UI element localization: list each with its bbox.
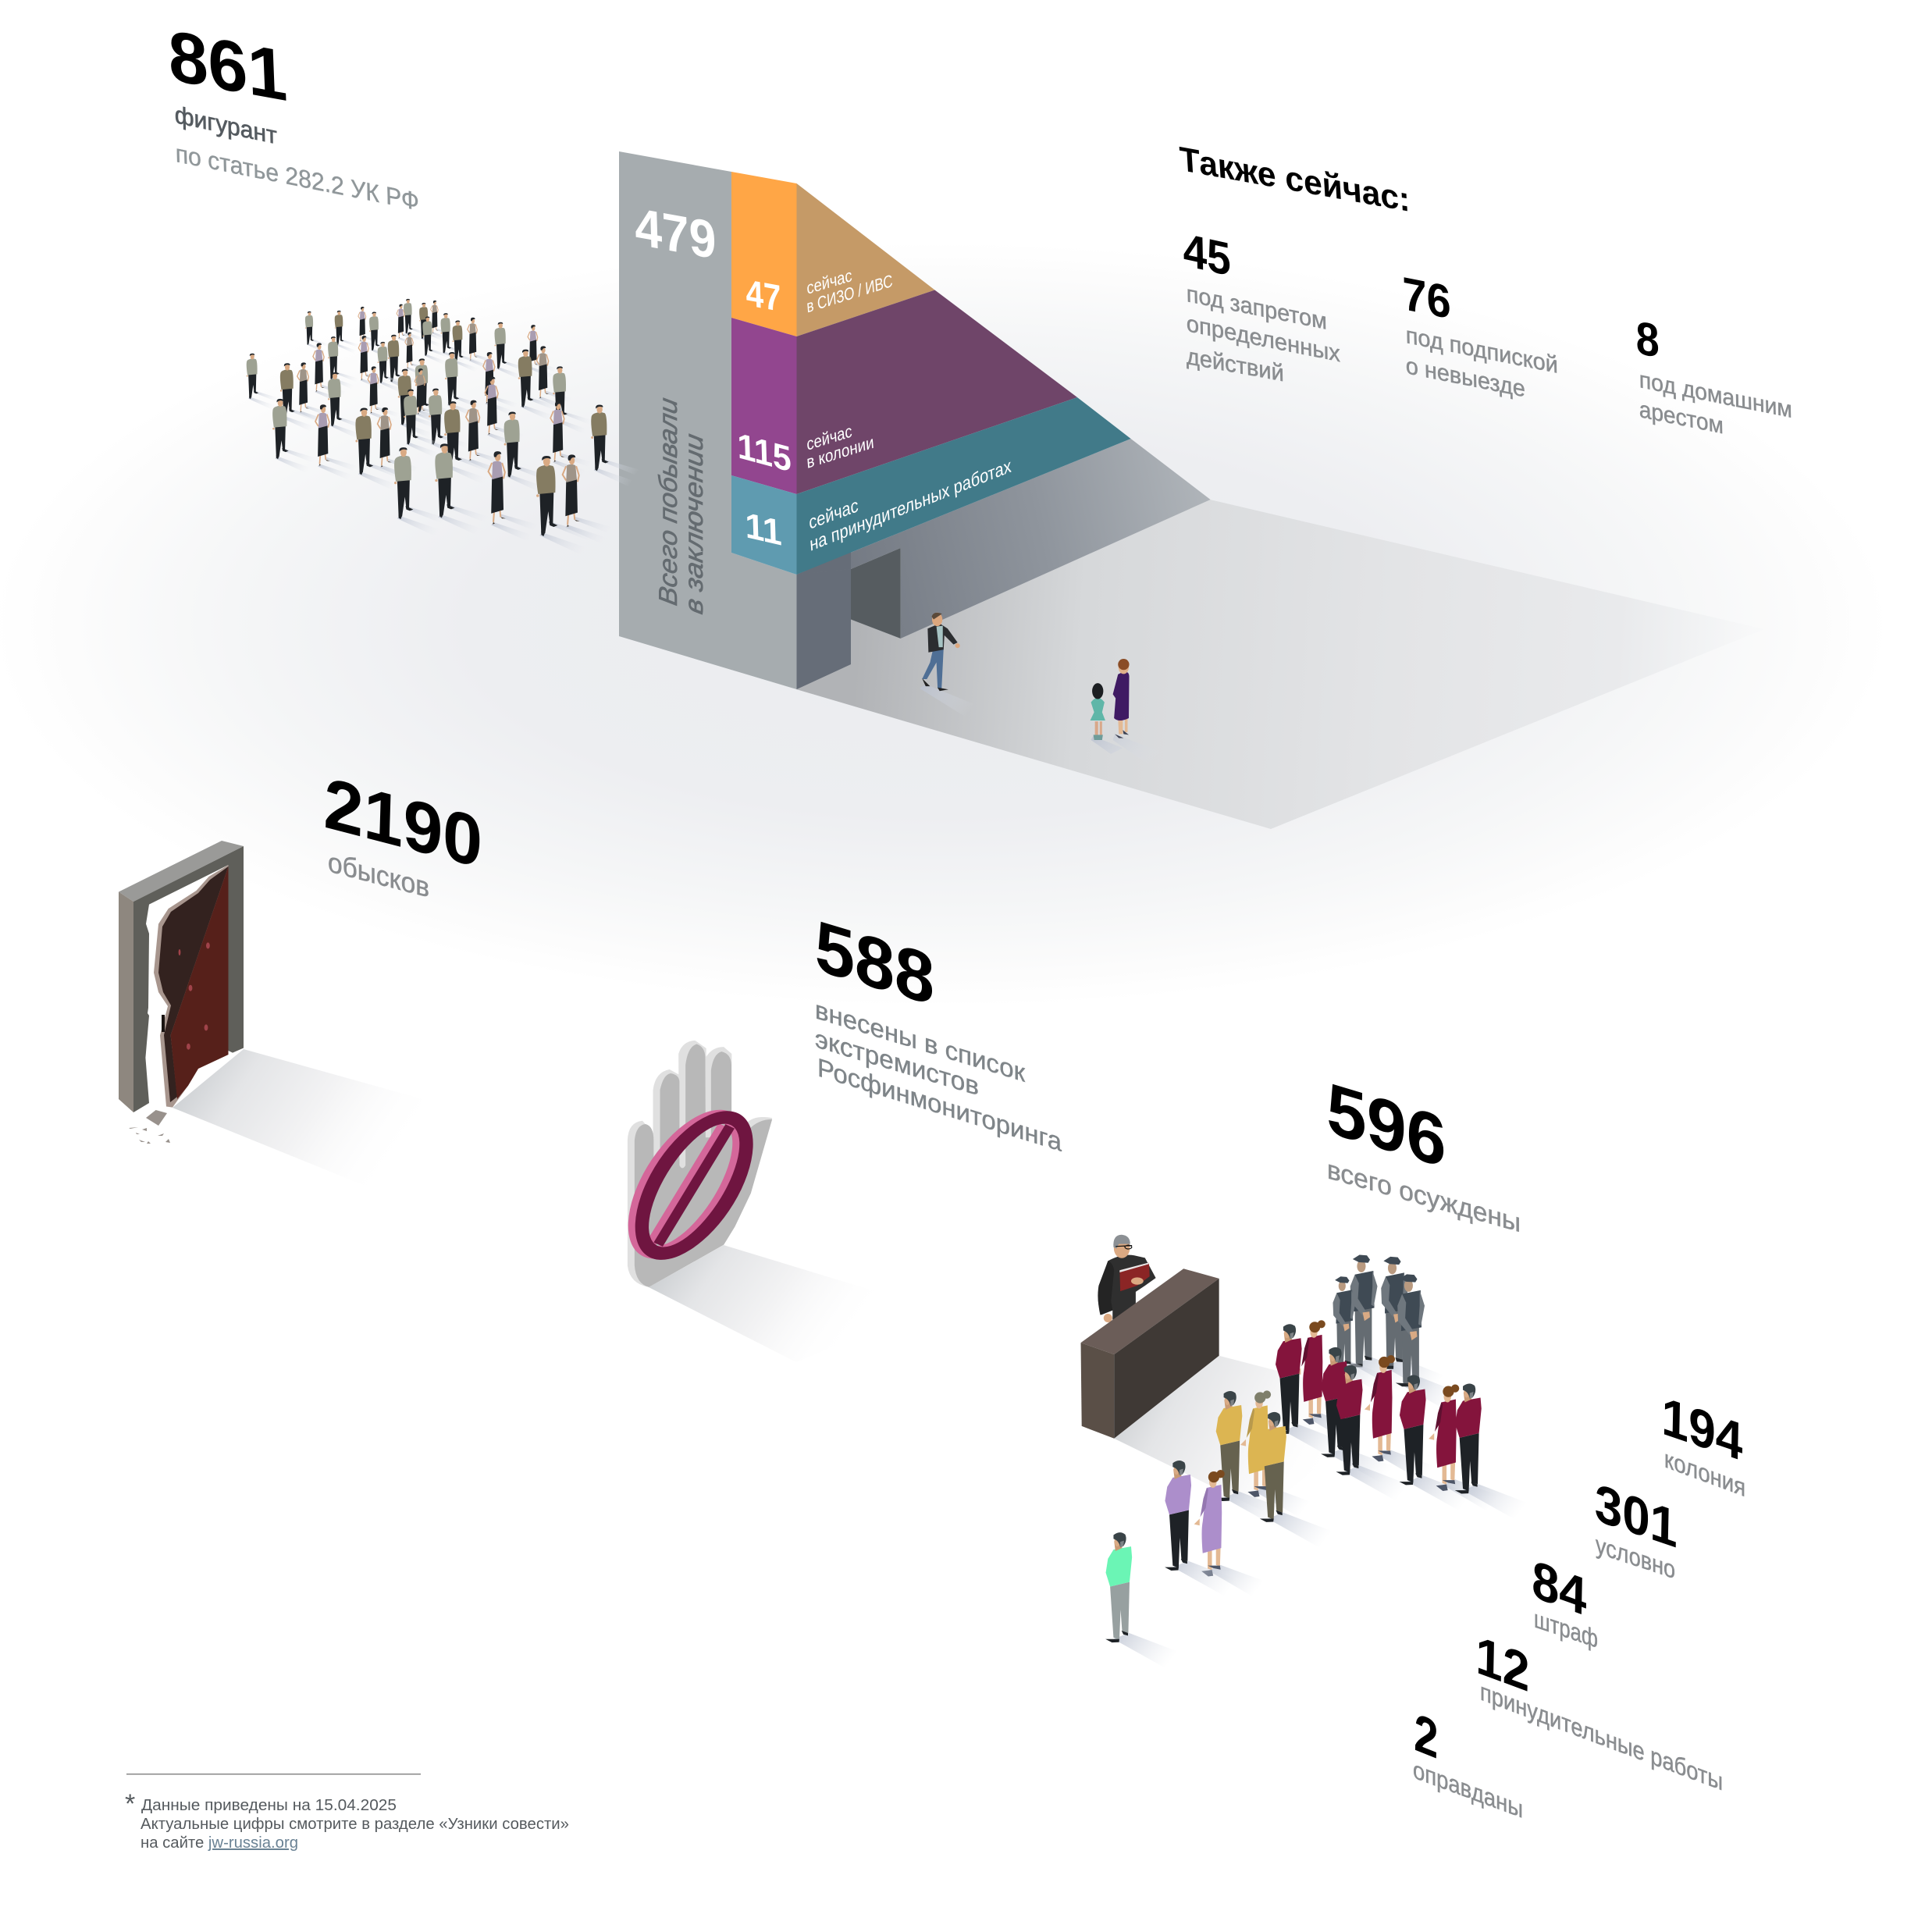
label: extremist list	[815, 995, 1062, 1158]
orange block	[731, 172, 796, 336]
label 45	[1186, 281, 1340, 386]
panel: imprisonment wall	[619, 151, 1211, 689]
label: SIZO: сейчас	[806, 265, 852, 298]
panel: also now	[1179, 140, 1792, 439]
icon: broken door	[119, 841, 244, 1144]
panel: extremist list	[604, 905, 1062, 1362]
panel: convicted	[1081, 1067, 1745, 1824]
label: total imprisoned	[654, 396, 709, 616]
label 76: под подпиской	[1405, 322, 1558, 379]
wall side in gradient	[796, 439, 1211, 689]
crowd of defendants	[247, 299, 639, 557]
stat 194: колония	[1664, 1445, 1745, 1503]
desk	[1081, 1268, 1219, 1439]
gray total block	[619, 151, 796, 689]
woman with child	[1091, 659, 1166, 766]
hand shadow	[649, 1245, 929, 1362]
panel: searches	[119, 761, 484, 1187]
label: extremist list: экстремистов	[815, 1024, 979, 1101]
number 2190: 2190	[322, 761, 484, 883]
number 588: 588	[814, 905, 935, 1020]
number 11: 11	[745, 505, 782, 553]
label 45: определенных	[1186, 311, 1340, 367]
label 45: действий	[1186, 343, 1284, 386]
stat 84: штраф	[1534, 1604, 1598, 1653]
number 479: 479	[634, 197, 717, 271]
judge	[1098, 1235, 1156, 1322]
stat 2: оправданы	[1413, 1756, 1523, 1824]
label: extremist list: Росфинмониторинга	[817, 1053, 1062, 1158]
stat 12	[1475, 1624, 1723, 1797]
blue block	[731, 475, 796, 575]
stat 8: 8	[1635, 311, 1660, 367]
label: total imprisoned: в заключении	[680, 432, 709, 616]
label: colony: сейчас	[806, 422, 852, 454]
number 596: 596	[1326, 1067, 1447, 1183]
label 45: под запретом	[1186, 281, 1327, 335]
label 76: о невыезде	[1405, 353, 1525, 403]
label: article: по статье 282.2 УК РФ	[175, 139, 419, 215]
walking man	[920, 613, 980, 718]
stat 12: принудительные работы	[1480, 1678, 1723, 1797]
footnote text: на сайте jw-russia.org	[141, 1834, 298, 1852]
desk shadow	[1114, 1356, 1401, 1511]
label: colony: в колонии	[806, 432, 874, 472]
purple block	[731, 318, 796, 494]
stat 12: 12	[1475, 1624, 1530, 1703]
label: convicted: всего осуждены	[1327, 1155, 1521, 1238]
background glow	[0, 242, 1889, 1007]
stat 194: 194	[1661, 1386, 1743, 1472]
stat 301: 301	[1594, 1472, 1678, 1560]
stat 76: 76	[1402, 267, 1451, 329]
pillar side	[796, 569, 851, 689]
label: SIZO: в СИЗО / ИВС	[806, 271, 893, 316]
label: forced labor: на принудительных работах	[809, 455, 1012, 556]
tan wedge	[796, 183, 935, 336]
colony group	[1276, 1320, 1531, 1520]
number 47: 47	[745, 272, 781, 320]
label 76	[1405, 322, 1558, 403]
label 8: арестом	[1639, 397, 1724, 439]
floor shadow	[796, 500, 1764, 829]
number 861: 861	[167, 15, 289, 116]
fine group	[1165, 1461, 1267, 1596]
label: forced labor: сейчас	[808, 495, 859, 534]
icon: hand with prohibition sign	[604, 1041, 777, 1287]
dark purple wedge	[796, 290, 1077, 494]
footnote	[125, 1774, 569, 1852]
footnote text	[141, 1797, 569, 1852]
label: searches: обысков	[328, 846, 429, 904]
asterisk: *	[125, 1789, 135, 1819]
stat 2: 2	[1414, 1701, 1439, 1770]
guards	[1332, 1254, 1462, 1411]
stat 84: 84	[1532, 1548, 1587, 1628]
number 115: 115	[737, 425, 792, 479]
footnote text: Актуальные цифры смотрите в разделе «Узники совести»	[141, 1816, 569, 1833]
label: extremist list: внесены в список	[815, 995, 1025, 1088]
heading: Также сейчас:	[1179, 140, 1411, 219]
label 8: под домашним	[1639, 367, 1792, 423]
stat 84	[1532, 1548, 1598, 1653]
stat 2	[1413, 1701, 1523, 1824]
court scene	[1081, 1235, 1531, 1668]
wall doorway	[851, 548, 901, 639]
probation group	[1215, 1390, 1336, 1548]
stat 301: условно	[1596, 1530, 1675, 1584]
label: total imprisoned: Всего побывали	[654, 396, 683, 607]
stat: 861	[167, 15, 419, 215]
acquitted figure	[1105, 1532, 1181, 1668]
door shadow	[173, 1049, 484, 1187]
label: defendants: фигурант	[174, 101, 277, 149]
stat 45: 45	[1183, 223, 1231, 286]
footnote text: Данные приведены на 15.04.2025	[141, 1797, 397, 1814]
teal wedge	[796, 397, 1131, 575]
